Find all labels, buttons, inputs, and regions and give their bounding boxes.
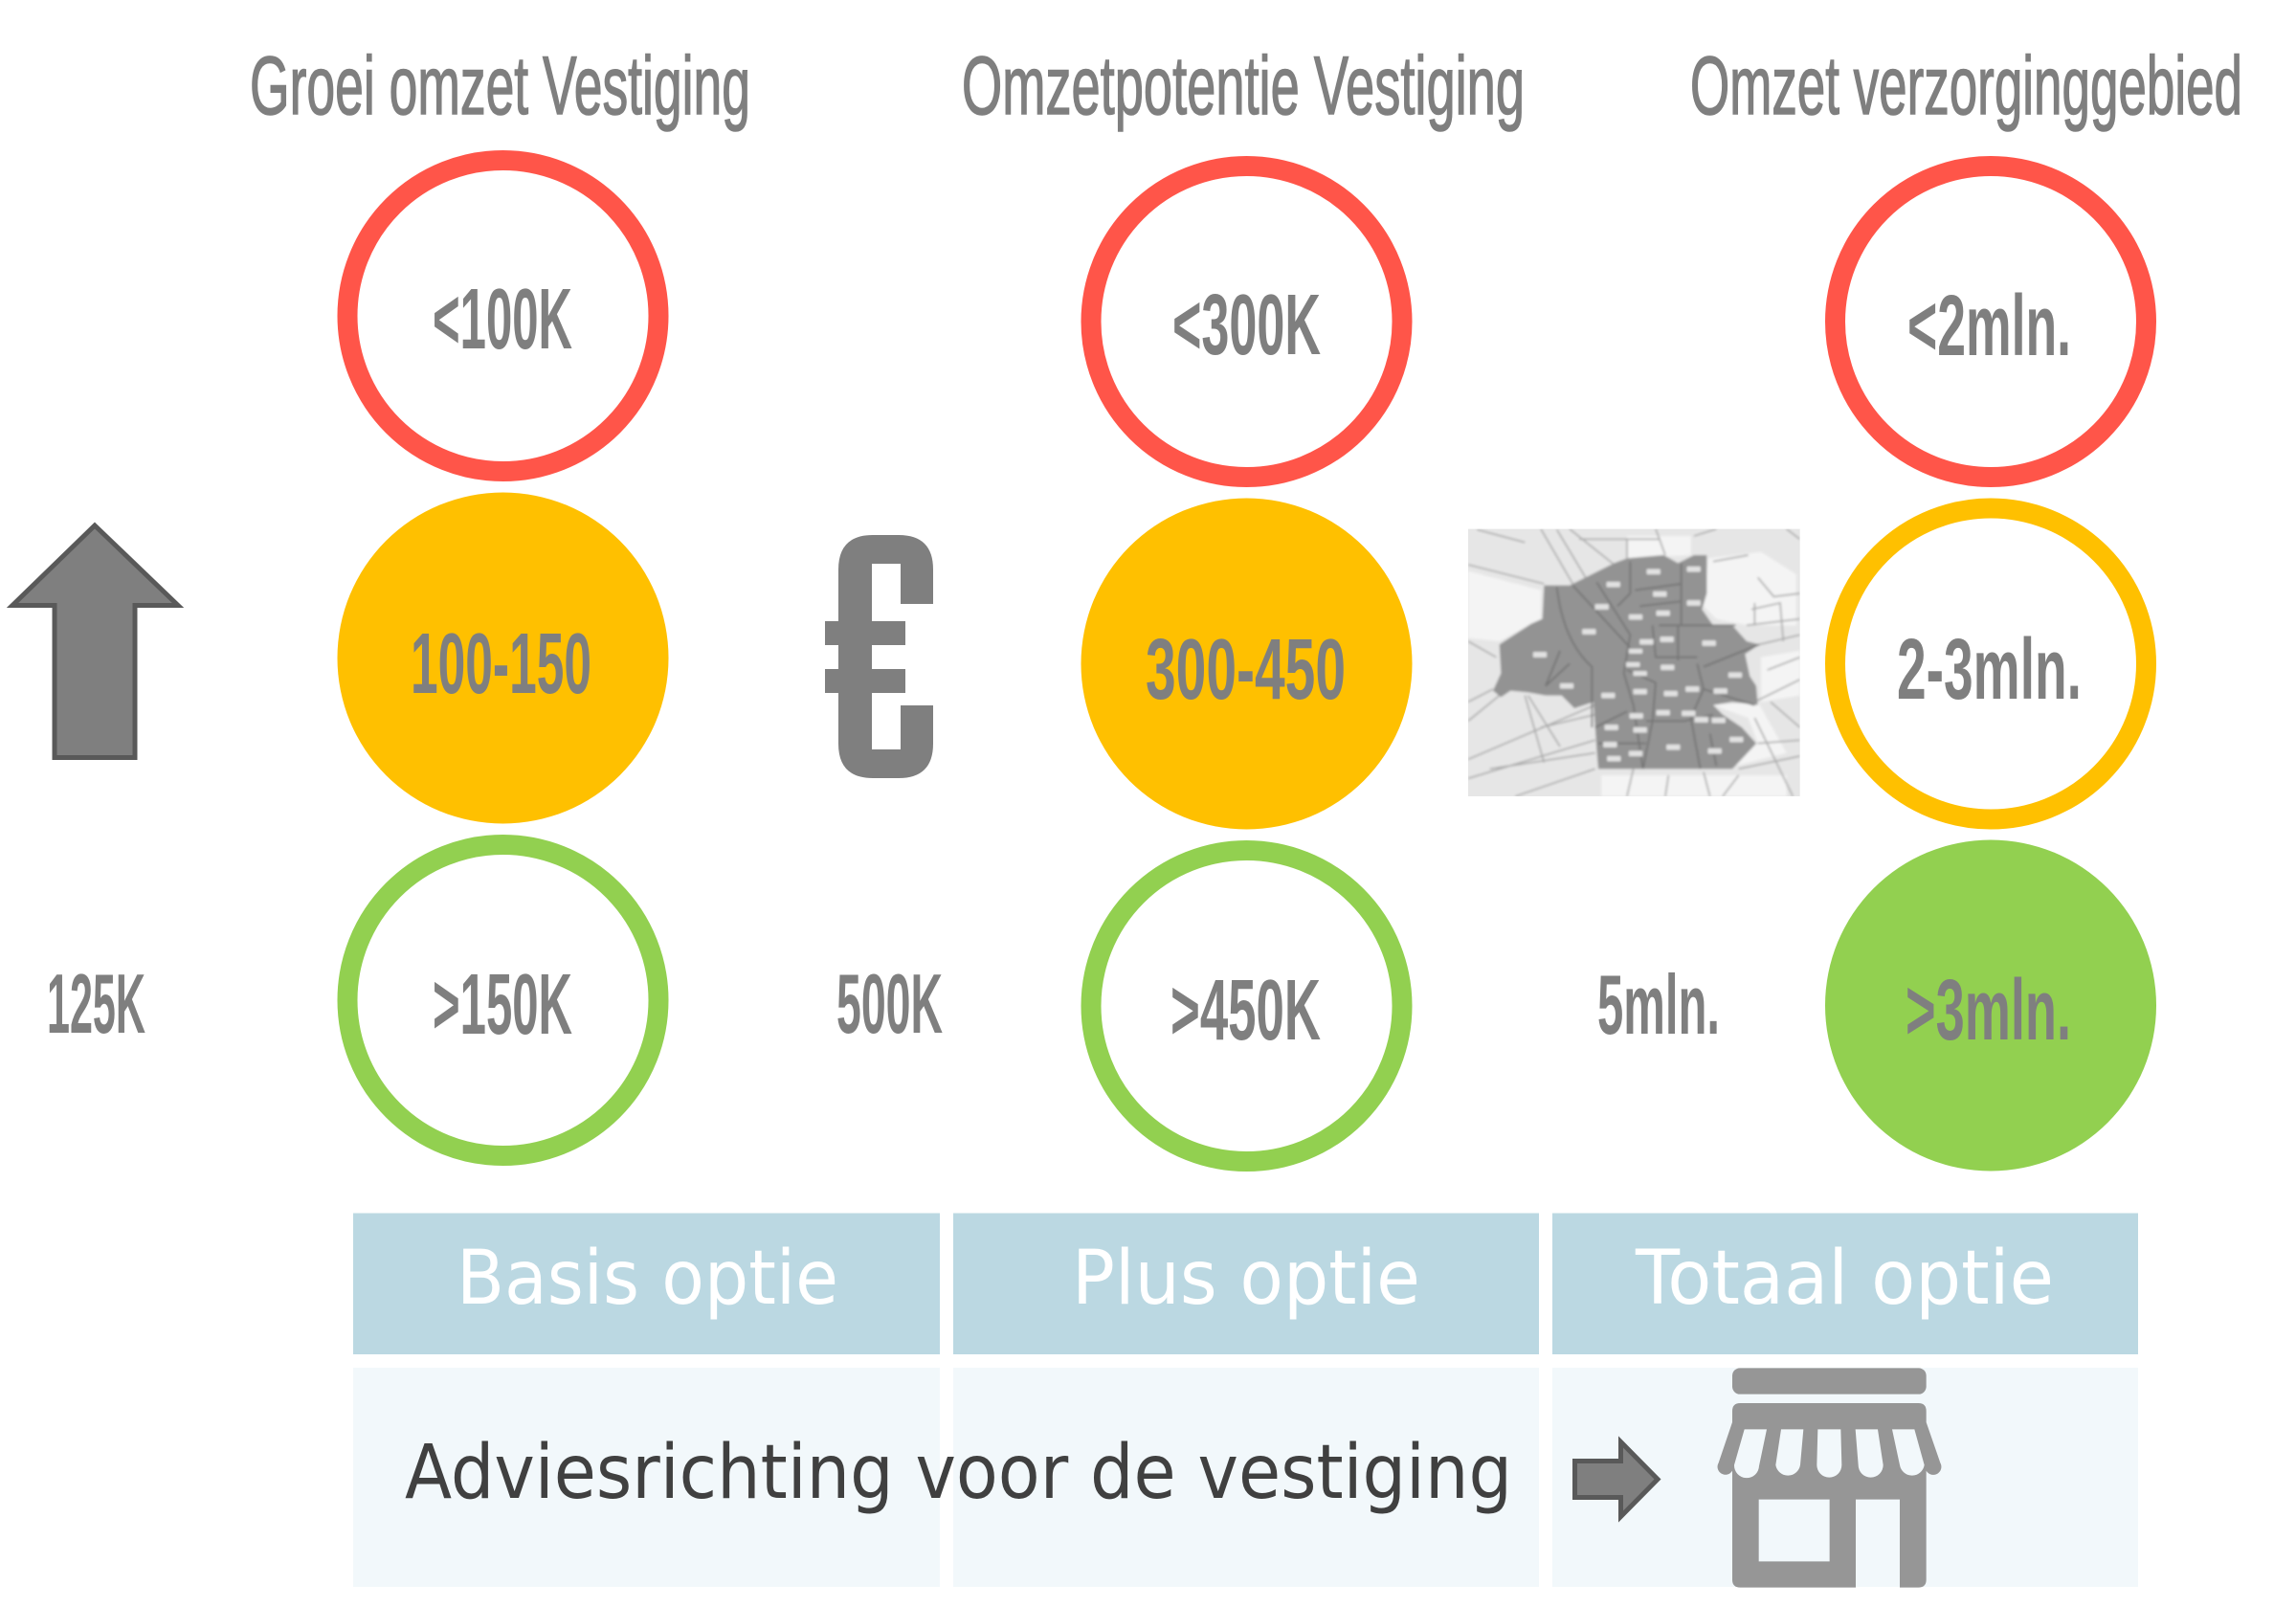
- green circle: above 450K: >450K: [1170, 963, 1321, 1059]
- red circle: below 100K: [347, 161, 658, 471]
- option header: Totaal optie: [1552, 1214, 2138, 1354]
- text: Adviesrichting voor de vestiging: Adviesrichting voor de vestiging: [405, 1430, 1512, 1516]
- column 1: groei omzet circles: [337, 161, 668, 1156]
- icon: up arrow: [12, 525, 178, 758]
- option header: Totaal optie: Totaal optie: [1635, 1236, 2054, 1322]
- green filled circle: above 3 mln: >3mln.: [1906, 963, 2071, 1059]
- red circle: below 2 mln: [1836, 167, 2146, 477]
- red circle: below 100K: <100K: [433, 272, 572, 368]
- icon: shop: [1718, 1368, 1941, 1588]
- column 2: omzetpotentie circles: [1081, 167, 1413, 1162]
- panel: totaal option body: [1552, 1368, 2138, 1587]
- red circle: below 2 mln: <2mln.: [1907, 279, 2071, 374]
- green circle: above 150K: >150K: [433, 957, 572, 1053]
- panel: basis option body: [353, 1368, 940, 1587]
- green circle: above 150K: [347, 844, 658, 1156]
- icon: euro sign: [825, 535, 933, 778]
- amber circle: 300-450: 300-450: [1146, 622, 1346, 718]
- amber circle: 100-150: [337, 492, 668, 823]
- title: Groei omzet Vestiging: Groei omzet Vestiging: [250, 40, 750, 132]
- option header: Plus optie: [953, 1214, 1539, 1354]
- icon: right arrow: [1575, 1441, 1658, 1516]
- title: Omzetpotentie Vestiging: Omzetpotentie Vestiging: [962, 40, 1525, 132]
- panel: plus option body: [953, 1368, 1539, 1587]
- green filled circle: above 3 mln: [1825, 840, 2156, 1172]
- green circle: above 450K: [1091, 850, 1402, 1162]
- option header: Basis optie: [353, 1214, 940, 1354]
- label: 5mln.: 5mln.: [1597, 957, 1720, 1052]
- label: 500K: 500K: [836, 956, 943, 1051]
- text: 125K: [47, 956, 145, 1051]
- red circle: below 300K: [1091, 167, 1402, 477]
- amber ring: 2-3 mln: [1836, 508, 2146, 819]
- column 3: omzet verzorgingsgebied circles: [1825, 167, 2156, 1172]
- red circle: below 300K: <300K: [1172, 278, 1321, 373]
- option header: Plus optie: Plus optie: [1072, 1236, 1420, 1322]
- image: map of service area: [1468, 528, 1800, 796]
- amber ring: 2-3 mln: 2-3mln.: [1897, 622, 2082, 718]
- option header: Basis optie: Basis optie: [457, 1236, 838, 1322]
- amber circle: 300-450: [1081, 498, 1413, 829]
- amber circle: 100-150: 100-150: [411, 616, 591, 712]
